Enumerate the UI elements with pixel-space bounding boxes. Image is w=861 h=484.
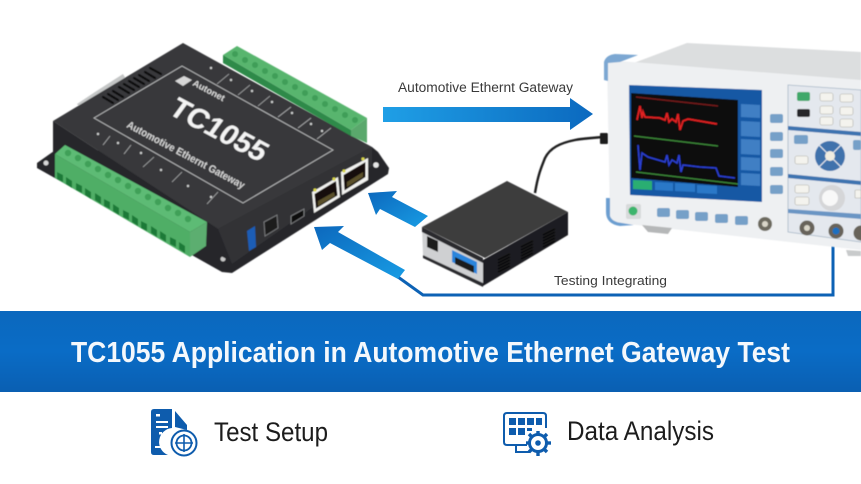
logo: Autonet <box>175 76 227 103</box>
RJ45 port 2 <box>341 157 368 195</box>
back terminal block <box>223 46 367 143</box>
panel keys <box>797 92 810 101</box>
box top <box>422 181 568 258</box>
label: Automotive Ethernt Gateway: Automotive Ethernt Gateway <box>398 80 573 95</box>
box right side <box>483 212 568 286</box>
scope display <box>631 93 738 187</box>
label: Testing Integrating: Testing Integrating <box>554 273 667 288</box>
top edge tick marks <box>103 74 331 204</box>
device subtitle: Automotive Ethernt Gateway <box>125 119 247 192</box>
top face <box>53 43 372 229</box>
BNC row <box>800 220 814 236</box>
banner <box>0 311 861 392</box>
front-left wall <box>53 121 232 262</box>
power jack <box>427 236 438 252</box>
BNC connector <box>758 217 772 231</box>
bottom buttons <box>657 208 748 225</box>
screen <box>629 85 762 202</box>
power connector <box>247 226 256 251</box>
USB-C port <box>291 209 304 224</box>
d-pad <box>815 141 845 171</box>
rotary knob <box>819 185 845 211</box>
side buttons <box>770 114 783 194</box>
instrument <box>600 43 861 256</box>
top panel <box>623 43 861 82</box>
vents <box>498 229 555 272</box>
box front <box>422 227 483 286</box>
cable <box>535 137 602 193</box>
vent slots <box>103 68 161 103</box>
screen softkeys <box>741 104 760 186</box>
USB port <box>264 215 278 236</box>
blue corner bumpers <box>604 54 638 81</box>
power button <box>626 204 641 219</box>
screen bottom tabs <box>633 180 652 190</box>
heading: Test Setup: Test Setup <box>214 417 328 447</box>
icon: test setup <box>151 409 196 456</box>
USB port <box>452 250 477 274</box>
heading: Data Analysis: Data Analysis <box>567 416 714 446</box>
D-sub connector <box>77 74 126 108</box>
label outline <box>94 66 333 203</box>
control panel <box>788 85 861 242</box>
banner title: TC1055 Application in Automotive Ethernet Gateway Test <box>71 337 790 369</box>
RJ45 port 1 <box>312 177 340 213</box>
logo: Autonet: Autonet <box>191 78 227 103</box>
adapter box with cable <box>422 137 602 287</box>
base plate <box>37 147 389 273</box>
icon: data analysis <box>504 413 551 456</box>
cable plug <box>600 133 608 144</box>
arrow: gateway to instrument <box>383 98 593 130</box>
traces <box>634 97 738 184</box>
arrow: box to device <box>368 191 428 227</box>
front-right wall <box>218 147 372 264</box>
feet <box>642 225 672 234</box>
front terminal block <box>55 145 207 257</box>
model name: TC1055 <box>163 93 274 168</box>
front panel <box>607 60 861 250</box>
device: TC1055 gateway <box>37 43 389 273</box>
arrow: testing line to device <box>314 226 833 295</box>
